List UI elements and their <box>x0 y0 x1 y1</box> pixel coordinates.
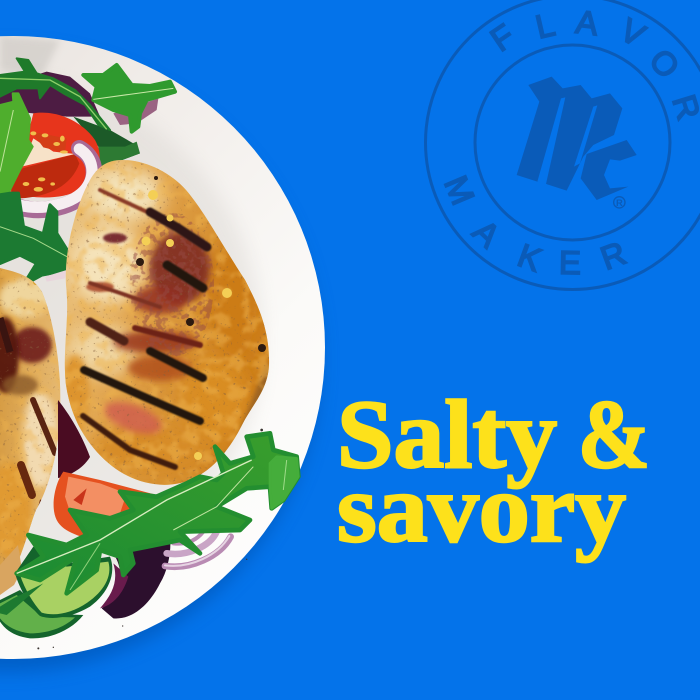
McCormick Flavor Maker logo <box>426 0 700 290</box>
ring text: A <box>466 212 507 254</box>
left chicken breast <box>0 268 60 595</box>
white plate <box>0 36 325 659</box>
grill marks <box>33 400 55 453</box>
ring text: R <box>596 234 631 277</box>
large arugula leaf <box>17 433 298 593</box>
plate of grilled chicken and salad <box>0 36 325 659</box>
Mc monogram <box>517 77 637 208</box>
headline: Salty <box>337 381 557 488</box>
red char patches <box>150 232 210 304</box>
ring text: K <box>513 236 547 279</box>
inner ring <box>475 45 670 240</box>
light green leaf <box>0 93 33 207</box>
ring text: M <box>437 170 482 210</box>
ring text: F <box>484 16 521 58</box>
grill marks <box>83 190 207 467</box>
Mc monogram: R <box>616 198 623 208</box>
beet slice <box>102 535 170 618</box>
ring text: E <box>559 244 581 281</box>
cucumber slices <box>0 547 112 638</box>
top arugula leaf <box>83 65 175 132</box>
red onion rings <box>165 532 231 567</box>
dark beet between chicken <box>58 400 90 478</box>
small arugula stem <box>0 583 43 615</box>
lower left arugula <box>0 193 72 285</box>
headline: savory <box>337 455 626 562</box>
ring text: A <box>574 3 600 42</box>
ring text <box>437 3 700 281</box>
lower salad <box>0 429 298 649</box>
dark leaf <box>73 117 140 168</box>
chicken base piece <box>0 545 22 595</box>
top left arugula <box>0 58 110 130</box>
headline: & <box>578 381 650 488</box>
red radicchio <box>0 72 100 117</box>
ring text: O <box>642 42 687 85</box>
spice flecks <box>136 176 266 352</box>
onion under leaf <box>45 270 67 282</box>
colour shading <box>87 169 163 221</box>
red onion ring <box>20 148 94 210</box>
headline <box>337 381 650 562</box>
tomato seeds <box>23 131 68 192</box>
tomato wedge <box>10 113 100 197</box>
upper salad <box>0 58 175 285</box>
plate shadow <box>0 48 320 672</box>
ring text: L <box>532 5 558 46</box>
outer ring <box>426 0 700 290</box>
main chicken breast <box>64 160 270 485</box>
tomato wedge <box>54 472 168 552</box>
ring text: V <box>614 11 651 54</box>
plate specks <box>37 429 263 649</box>
